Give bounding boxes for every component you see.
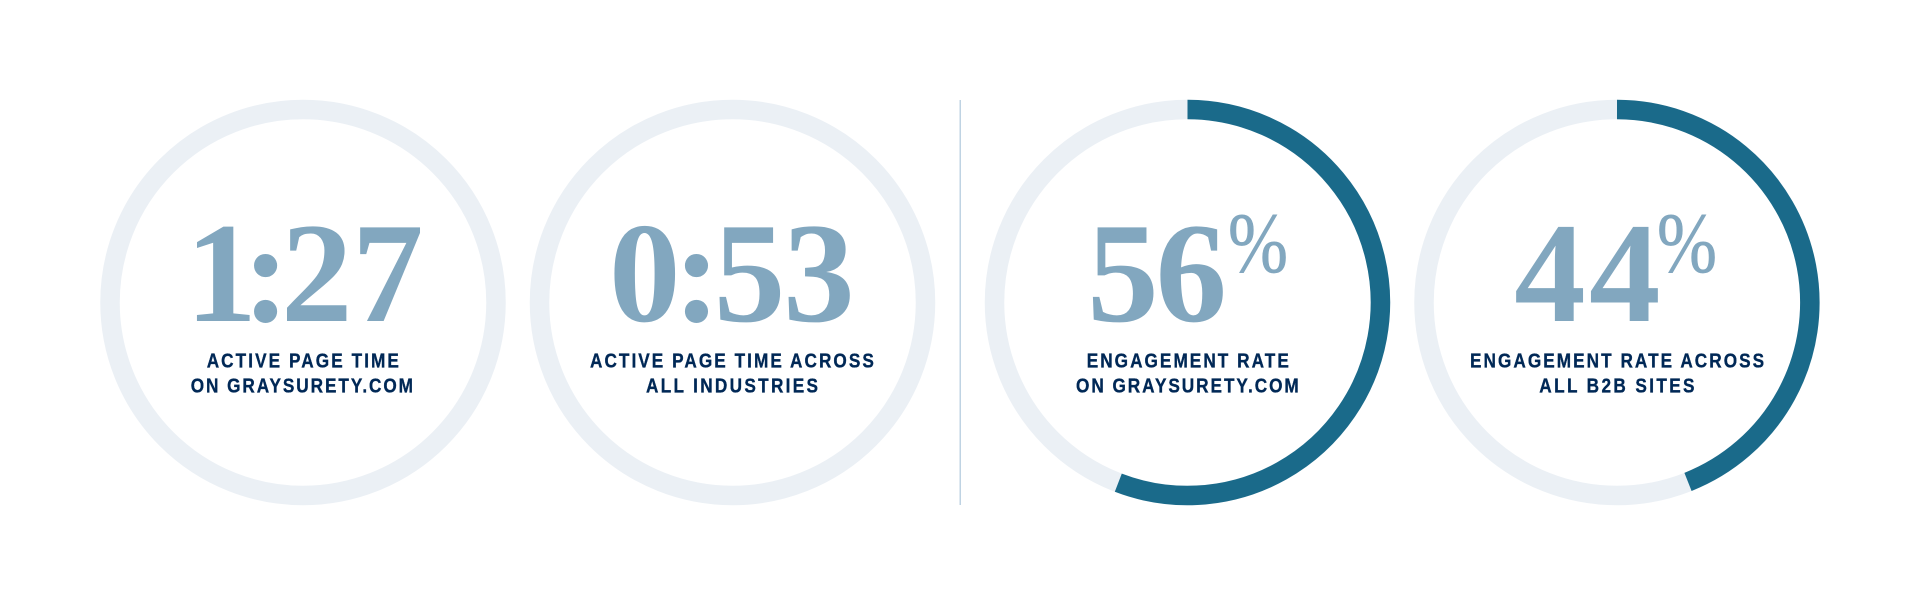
stat: 56% <box>1087 194 1288 352</box>
stat: 56%: 56 <box>1087 194 1227 352</box>
stat: 0:53: 0:53 <box>609 194 855 352</box>
label: engagement rate on graysurety.com: ON GRAYSURETY.COM <box>1076 374 1299 397</box>
arc: 56 percent <box>1118 110 1380 496</box>
label: active page time across all industries <box>590 349 874 397</box>
stat: 1:27: 1:27 <box>186 194 424 352</box>
panel: engagement rate on graysurety.com <box>994 110 1380 496</box>
label: active page time across all industries: ALL INDUSTRIES <box>646 374 818 397</box>
label: engagement rate across all b2b sites <box>1470 349 1764 397</box>
label: active page time on graysurety.com: ON GRAYSURETY.COM <box>191 374 413 397</box>
label: active page time on graysurety.com <box>191 349 413 397</box>
label: engagement rate across all b2b sites: ENGAGEMENT RATE ACROSS <box>1470 349 1764 372</box>
stat: 56%: % <box>1228 195 1288 291</box>
panel: engagement rate across all b2b sites <box>1424 110 1810 496</box>
label: active page time across all industries: ACTIVE PAGE TIME ACROSS <box>590 349 874 372</box>
label: engagement rate on graysurety.com <box>1076 349 1299 397</box>
ring: track <box>1424 110 1810 496</box>
panel: active page time across all industries <box>540 110 926 496</box>
stat: 44%: 44 <box>1514 194 1660 352</box>
ring: track <box>994 110 1380 496</box>
ring: track <box>540 110 926 496</box>
label: engagement rate across all b2b sites: ALL B2B SITES <box>1539 374 1695 397</box>
arc: 44 percent <box>1617 110 1810 482</box>
stat: 44%: % <box>1657 195 1717 291</box>
ring: track <box>110 110 496 496</box>
panel: active page time on graysurety.com <box>110 110 496 496</box>
label: engagement rate on graysurety.com: ENGAGEMENT RATE <box>1087 349 1289 372</box>
divider line <box>960 100 961 505</box>
label: active page time on graysurety.com: ACTIVE PAGE TIME <box>207 349 399 372</box>
